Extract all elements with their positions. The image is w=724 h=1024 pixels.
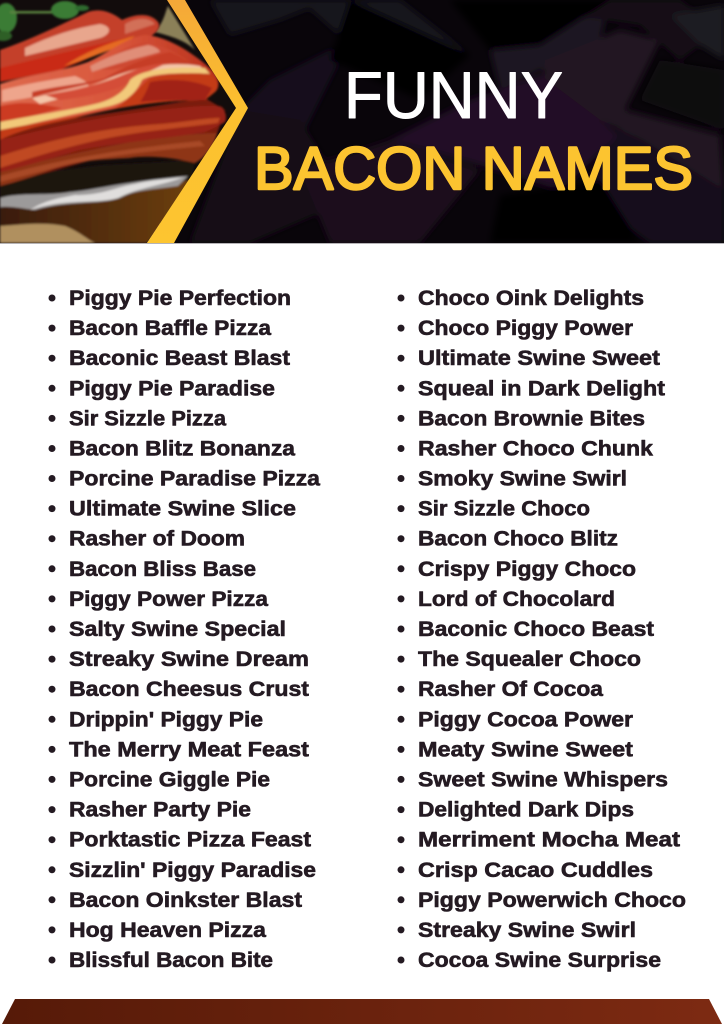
seared edge (0, 73, 218, 140)
item: The Merry Meat Feast (69, 738, 309, 761)
item: Crispy Piggy Choco (418, 558, 636, 581)
item: Crisp Cacao Cuddles (418, 859, 653, 882)
item: Bacon Choco Blitz (418, 528, 618, 551)
item: Bacon Cheesus Crust (69, 678, 309, 701)
item: Ultimate Swine Sweet (418, 347, 660, 370)
light tan wedge (0, 224, 95, 243)
third bacon strip (0, 106, 226, 172)
item: Porcine Giggle Pie (69, 768, 270, 791)
item: Choco Oink Delights (418, 287, 644, 310)
left names list (48, 287, 320, 972)
item: The Squealer Choco (418, 648, 641, 671)
item: Bacon Baffle Pizza (69, 317, 271, 340)
item: Porktastic Pizza Feast (69, 829, 311, 852)
title: funny: FUNNY (344, 58, 563, 132)
parsley garnish (0, 1, 89, 41)
header banner (0, 0, 724, 243)
item: Baconic Beast Blast (69, 347, 290, 370)
item: Rasher Party Pie (69, 799, 251, 822)
item: Bacon Bliss Base (69, 558, 256, 581)
item: Streaky Swine Swirl (418, 919, 636, 942)
item: Bacon Blitz Bonanza (69, 438, 295, 460)
banner bottom edge (0, 243, 724, 244)
item: Baconic Choco Beast (418, 618, 654, 641)
item: Smoky Swine Swirl (418, 468, 627, 490)
item: Porcine Paradise Pizza (69, 468, 320, 490)
item: Rasher Choco Chunk (418, 438, 653, 460)
item: Hog Heaven Pizza (69, 919, 266, 942)
dried garnish behind bacon (155, 6, 195, 50)
item: Rasher Of Cocoa (418, 678, 603, 701)
item: Squeal in Dark Delight (418, 377, 665, 400)
item: Sweet Swine Whispers (418, 768, 668, 791)
item: Meaty Swine Sweet (418, 738, 633, 761)
item: Sir Sizzle Pizza (69, 407, 226, 430)
item: Cocoa Swine Surprise (418, 949, 661, 972)
foil sheet (0, 176, 188, 210)
item: Piggy Cocoa Power (418, 708, 633, 731)
main bacon strip (0, 35, 218, 135)
dark faceted background (160, 0, 724, 243)
red underlay between strips (0, 98, 226, 176)
yellow chevron (147, 0, 248, 243)
brown board (0, 178, 189, 243)
item: Streaky Swine Dream (69, 648, 309, 671)
item: Rasher of Doom (69, 528, 245, 551)
item: Bacon Oinkster Blast (69, 889, 302, 912)
title: bacon names: BACON NAMES (254, 134, 693, 202)
yellow fat band (0, 68, 210, 132)
item: Merriment Mocha Meat (418, 829, 680, 852)
back bacon strip (0, 10, 159, 78)
item: Choco Piggy Power (418, 317, 633, 340)
item: Piggy Power Pizza (69, 588, 268, 611)
item: Ultimate Swine Slice (69, 498, 296, 521)
item: Bacon Brownie Bites (418, 407, 645, 430)
item: Blissful Bacon Bite (69, 949, 273, 972)
bottom bacon strip (0, 133, 217, 186)
item: Piggy Pie Paradise (69, 377, 275, 400)
item: Sizzlin' Piggy Paradise (69, 859, 316, 882)
item: Delighted Dark Dips (418, 799, 634, 822)
item: Lord of Chocolard (418, 588, 615, 611)
dark shadow layer (0, 160, 195, 200)
item: Sir Sizzle Choco (418, 498, 590, 521)
item: Drippin' Piggy Pie (69, 708, 263, 731)
item: Piggy Powerwich Choco (418, 889, 686, 912)
item: Piggy Pie Perfection (69, 287, 291, 310)
footer bar (2, 999, 722, 1024)
right names list (398, 287, 686, 972)
bacon photo (0, 0, 240, 243)
item: Salty Swine Special (69, 618, 286, 641)
